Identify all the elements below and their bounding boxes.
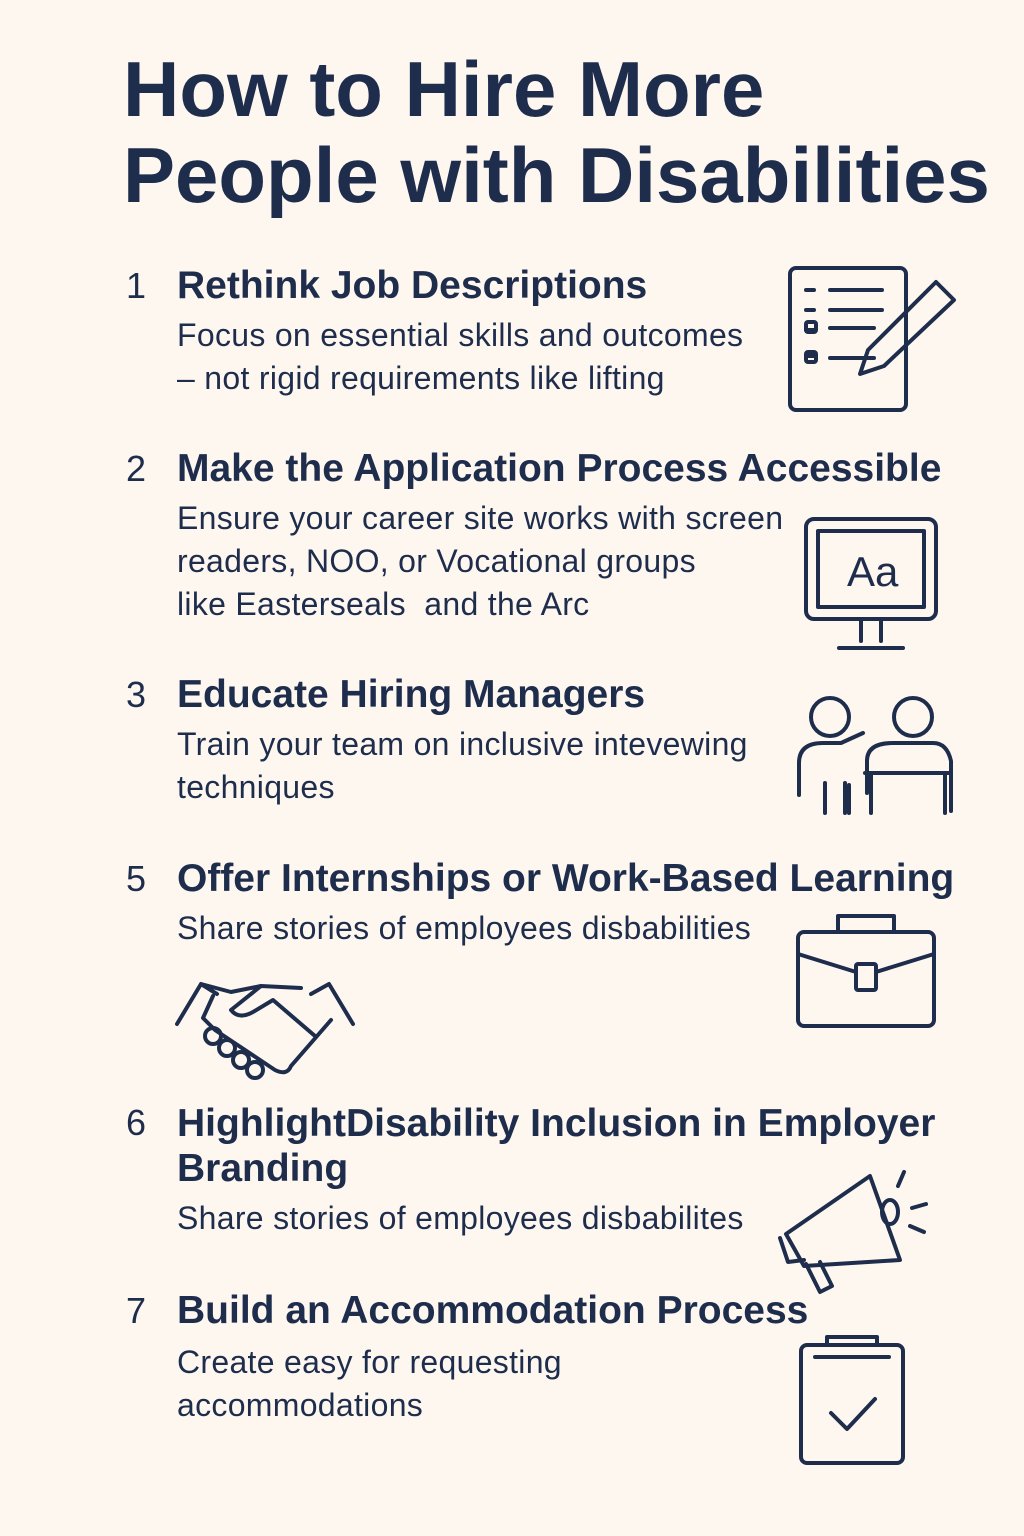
item 6: Branding [177,1147,348,1190]
item 7: 7 [126,1290,146,1331]
icon: handshake [174,982,356,1080]
item 2: Make the Application Process Accessible [177,447,941,490]
item 2: like Easterseals and the Arc [177,586,589,622]
item 5: 5 [126,858,146,899]
item 1: – not rigid requirements like lifting [177,360,665,396]
item 1: 1 [126,265,146,306]
item 1 [126,264,743,396]
title: People with Disabilities [123,131,990,219]
item 2 [126,447,941,622]
item 5: Offer Internships or Work-Based Learning [177,857,954,900]
item 2: 2 [126,448,146,489]
item 5: Share stories of employees disbabilities [177,910,751,946]
item 7: Create easy for requesting [177,1344,562,1380]
item 3: Train your team on inclusive intevewing [177,726,748,762]
icon: people [797,696,953,815]
item 1: Rethink Job Descriptions [177,264,647,307]
item 7: accommodations [177,1387,423,1423]
item 2: Ensure your career site works with screen [177,500,783,536]
item 6: Share stories of employees disbabilites [177,1200,744,1236]
icon: clipboard check [799,1335,905,1465]
item 3: Educate Hiring Managers [177,673,645,716]
item 1: Focus on essential skills and outcomes [177,317,743,353]
item 6: HighlightDisability Inclusion in Employer [177,1102,935,1145]
icon: checklist with pencil [788,266,956,412]
item 7: Build an Accommodation Process [177,1289,808,1332]
icon: megaphone [778,1170,928,1294]
item 5 [126,857,954,946]
title [123,45,990,219]
icon: monitor: Aa [847,548,899,595]
item 3 [126,673,748,805]
item 6 [126,1102,935,1236]
icon: briefcase [796,914,936,1028]
title: How to Hire More [123,45,764,133]
item 3: techniques [177,769,335,805]
item 7 [126,1289,808,1423]
item 3: 3 [126,674,146,715]
item 2: readers, NOO, or Vocational groups [177,543,696,579]
item 6: 6 [126,1102,146,1143]
icon: monitor [804,517,938,650]
